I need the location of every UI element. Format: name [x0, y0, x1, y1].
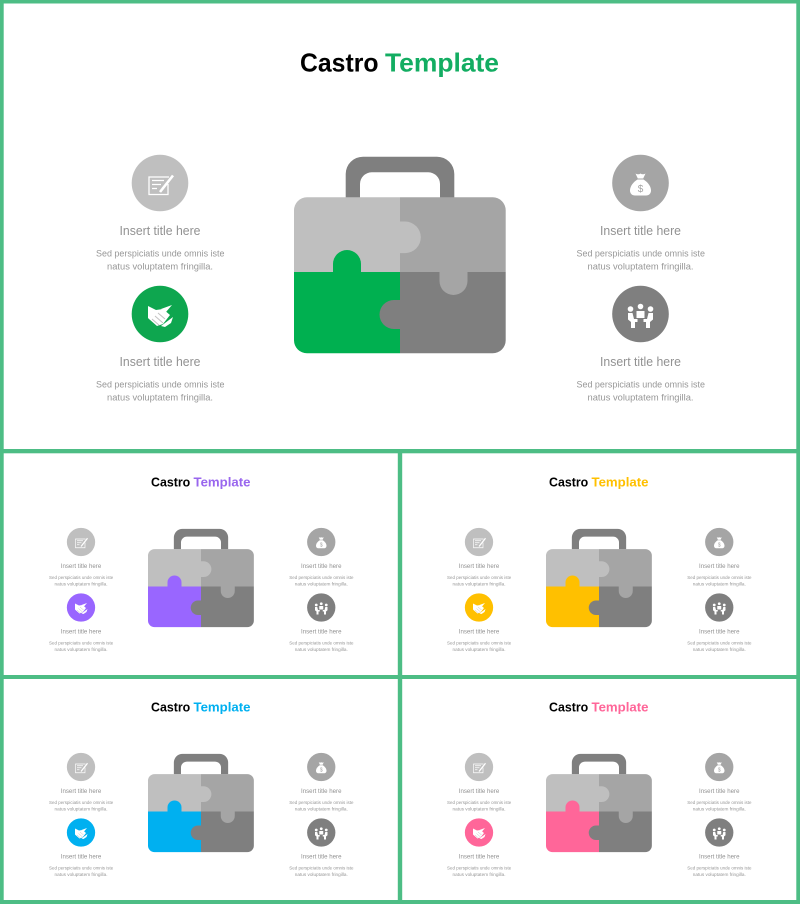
item: top left	[49, 528, 114, 587]
item: bottom left: Insert title here	[61, 854, 102, 860]
puzzle briefcase	[546, 529, 652, 627]
item: bottom left: natus voluptatem fringilla.	[54, 872, 108, 878]
item: top left	[49, 753, 114, 812]
item: bottom right: Insert title here	[699, 628, 740, 636]
item: top right: $	[718, 542, 721, 548]
item: bottom right: natus voluptatem fringilla.	[588, 392, 694, 404]
title: Castro	[151, 699, 190, 714]
item: bottom left	[49, 593, 114, 653]
item: top left: natus voluptatem fringilla.	[107, 262, 213, 272]
item: top left	[447, 753, 512, 812]
item: top right: natus voluptatem fringilla.	[693, 806, 746, 812]
item: bottom right: natus voluptatem fringilla.	[295, 647, 348, 653]
item: top right	[576, 155, 705, 272]
item: bottom left	[447, 818, 512, 878]
item: bottom right	[687, 818, 752, 878]
item: bottom left: natus voluptatem fringilla.	[452, 647, 506, 653]
item: bottom right: Sed perspiciatis unde omnis iste	[289, 865, 354, 871]
title: Template	[385, 48, 499, 78]
item: top left: Sed perspiciatis unde omnis iste	[447, 575, 512, 581]
item: bottom right: Sed perspiciatis unde omnis iste	[687, 865, 752, 871]
title: Castro	[300, 48, 378, 78]
item: top right: Sed perspiciatis unde omnis iste	[576, 248, 705, 260]
item: bottom left: Sed perspiciatis unde omnis iste	[447, 640, 512, 646]
item: top left: Sed perspiciatis unde omnis iste	[447, 800, 512, 806]
item: top right: Sed perspiciatis unde omnis iste	[687, 800, 752, 806]
item: top right: $	[320, 768, 323, 774]
item: top left: Insert title here	[61, 563, 102, 570]
panel: yellow slide	[447, 474, 752, 653]
item: bottom right	[687, 593, 752, 653]
item: top left	[96, 155, 224, 272]
item: top left: Insert title here	[120, 224, 201, 238]
title	[300, 48, 499, 78]
item: bottom right: Sed perspiciatis unde omnis iste	[687, 640, 752, 646]
puzzle briefcase	[546, 754, 652, 852]
item: top right	[289, 528, 354, 587]
item: top right: Insert title here	[600, 224, 681, 238]
item: top left: natus voluptatem fringilla.	[54, 806, 108, 812]
item: bottom right: Sed perspiciatis unde omnis iste	[576, 380, 705, 390]
title: Castro	[151, 474, 190, 489]
item: top left: Insert title here	[61, 788, 102, 795]
item: top right: $	[320, 542, 323, 548]
item: top right: $	[718, 768, 721, 774]
item: bottom left: Sed perspiciatis unde omnis iste	[96, 380, 224, 390]
item: top right: natus voluptatem fringilla.	[588, 262, 694, 272]
item: bottom left: Insert title here	[459, 854, 500, 860]
item: bottom left: Sed perspiciatis unde omnis iste	[49, 865, 114, 871]
puzzle briefcase	[148, 529, 254, 627]
panel: main green slide	[96, 48, 705, 403]
item: top left: Sed perspiciatis unde omnis iste	[96, 248, 224, 260]
panel: purple slide	[49, 474, 354, 653]
item: bottom right	[289, 818, 354, 878]
item: top left: Insert title here	[459, 788, 500, 795]
item: bottom right: Insert title here	[301, 628, 342, 636]
item: top right: Insert title here	[301, 563, 342, 570]
item: bottom right	[289, 593, 354, 653]
title: Castro	[549, 699, 588, 714]
item: top right	[687, 753, 752, 812]
item: bottom left: Insert title here	[459, 628, 500, 636]
item: bottom left	[96, 286, 224, 404]
title: Template	[194, 474, 250, 489]
title: Template	[194, 699, 250, 714]
item: top right: Insert title here	[301, 788, 342, 795]
item: bottom left: Sed perspiciatis unde omnis iste	[447, 865, 512, 871]
item: top right: Sed perspiciatis unde omnis iste	[289, 800, 354, 806]
item: top left: natus voluptatem fringilla.	[54, 581, 108, 587]
item: top right: Insert title here	[699, 563, 740, 570]
title: Castro	[549, 474, 588, 489]
item: top left: natus voluptatem fringilla.	[452, 806, 506, 812]
item: top right	[289, 753, 354, 812]
item: bottom left	[49, 818, 114, 878]
item: top right: Sed perspiciatis unde omnis iste	[289, 575, 354, 581]
item: top right: natus voluptatem fringilla.	[295, 806, 348, 812]
item: bottom right: Sed perspiciatis unde omnis iste	[289, 640, 354, 646]
item: top right: Sed perspiciatis unde omnis iste	[687, 575, 752, 581]
panel: blue slide	[49, 699, 354, 878]
item: top right: Insert title here	[699, 788, 740, 795]
item: top left: natus voluptatem fringilla.	[452, 581, 506, 587]
item: top right: $	[638, 184, 644, 195]
item: bottom left	[447, 593, 512, 653]
title	[549, 474, 648, 489]
item: bottom right	[576, 286, 705, 404]
item: bottom right: Insert title here	[301, 854, 342, 860]
item: top right: natus voluptatem fringilla.	[693, 581, 746, 587]
title	[151, 474, 250, 489]
item: bottom right: natus voluptatem fringilla.	[693, 647, 746, 653]
item: bottom left: natus voluptatem fringilla.	[452, 872, 506, 878]
item: top left	[447, 528, 512, 587]
puzzle briefcase	[294, 157, 506, 353]
item: bottom left: Insert title here	[61, 628, 102, 636]
item: top left: Insert title here	[459, 563, 500, 570]
title	[549, 699, 648, 714]
item: top right	[687, 528, 752, 587]
panel: pink slide	[447, 699, 752, 878]
puzzle briefcase	[148, 754, 254, 852]
item: top left: Sed perspiciatis unde omnis iste	[49, 575, 114, 581]
item: bottom left: natus voluptatem fringilla.	[107, 392, 213, 404]
item: bottom right: natus voluptatem fringilla.	[295, 872, 348, 878]
item: bottom right: Insert title here	[600, 355, 681, 369]
item: bottom left: natus voluptatem fringilla.	[54, 647, 108, 653]
title: Template	[592, 699, 648, 714]
item: bottom right: natus voluptatem fringilla.	[693, 872, 746, 878]
item: top left: Sed perspiciatis unde omnis iste	[49, 800, 114, 806]
item: bottom right: Insert title here	[699, 854, 740, 860]
item: bottom left: Sed perspiciatis unde omnis iste	[49, 640, 114, 646]
item: top right: natus voluptatem fringilla.	[295, 581, 348, 587]
title	[151, 699, 250, 714]
title: Template	[592, 474, 648, 489]
item: bottom left: Insert title here	[120, 355, 201, 369]
